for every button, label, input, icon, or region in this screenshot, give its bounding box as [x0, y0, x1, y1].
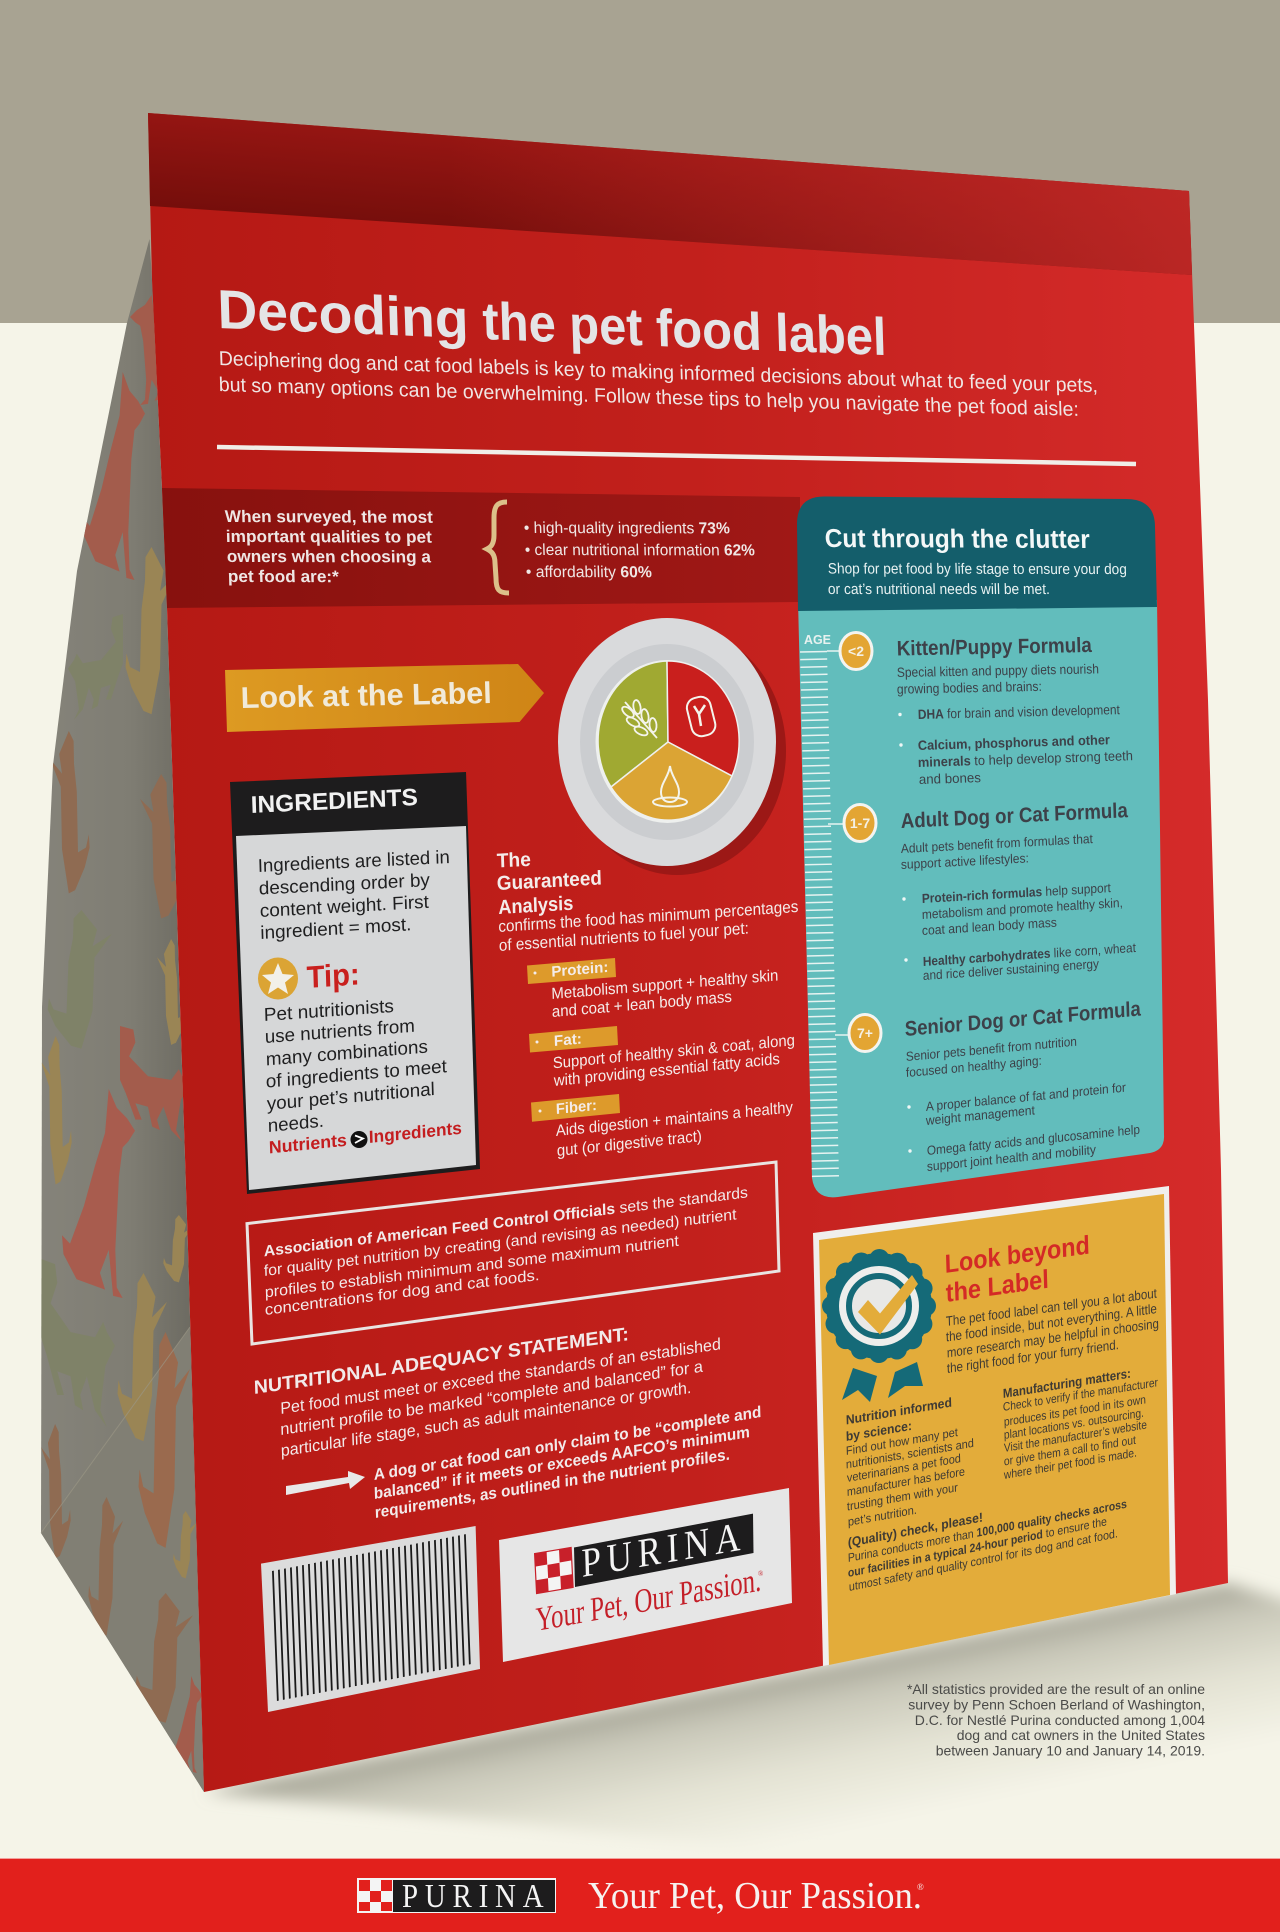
survey intro text: When surveyed, the most	[225, 507, 433, 527]
survey results list	[524, 520, 755, 581]
age badge 1-7: 1-7	[850, 815, 870, 831]
adult formula: coat and lean body mass	[922, 915, 1058, 938]
kitten puppy formula	[896, 634, 1133, 787]
nutrients greater than ingredients	[269, 1118, 462, 1157]
title: Decoding	[217, 278, 469, 350]
adult formula: Healthy carbohydrates like corn, wheat	[923, 940, 1136, 969]
statement body: Pet food must meet or exceed the standards of an established	[280, 1334, 721, 1418]
quality check: our facilities in a typical 24-hour period to ensure the	[848, 1514, 1107, 1580]
nutrition informed by science: pet’s nutrition.	[848, 1503, 917, 1529]
quality check: Purina conducts more than 100,000 quality checks across	[848, 1497, 1127, 1565]
footer bar: ®	[917, 1882, 924, 1892]
nutrition informed by science: nutritionists, scientists and	[846, 1436, 974, 1471]
purina logo panel: ®	[758, 1570, 764, 1578]
fiber item	[531, 1094, 793, 1160]
guaranteed analysis heading: The	[496, 849, 531, 872]
kitten puppy formula: Kitten/Puppy Formula	[896, 634, 1092, 660]
guaranteed analysis heading: Guaranteed	[496, 867, 602, 895]
tip heading: Tip:	[306, 956, 360, 995]
age badge 7+	[849, 1014, 881, 1052]
purina logo panel: Your Pet, Our Passion.	[535, 1561, 762, 1639]
survey footnote	[907, 1681, 1205, 1758]
title: the pet food label	[482, 292, 887, 367]
nutrition informed by science: manufacturer has before	[847, 1464, 965, 1499]
age badge under 2: <2	[848, 643, 864, 659]
light teal body	[798, 600, 1164, 1197]
gold wedge	[611, 742, 732, 820]
food plate pie chart	[558, 618, 786, 875]
senior formula: Omega fatty acids and glucosamine help	[927, 1122, 1140, 1158]
front panel of bag	[148, 113, 1228, 1792]
intro text	[218, 348, 1098, 421]
survey band	[162, 488, 800, 608]
age badge under 2	[840, 632, 872, 670]
survey footnote: D.C. for Nestlé Purina conducted among 1,004	[915, 1712, 1205, 1728]
icon: rosette with checkmark	[826, 1253, 932, 1402]
tip body: of ingredients to meet	[265, 1055, 448, 1092]
AAFCO box: concentrations for dog and cat foods.	[265, 1267, 540, 1319]
fiber item: gut (or digestive tract)	[557, 1127, 702, 1160]
tip body: many combinations	[265, 1036, 428, 1069]
side gusset with pet silhouettes	[41, 239, 204, 1792]
nutrition informed by science: veterinarians a pet food	[847, 1451, 961, 1485]
footer purina logo: PURINA	[402, 1877, 550, 1915]
quality check: utmost safety and quality control for its dog and cat food.	[849, 1526, 1118, 1594]
nutrients greater than ingredients: Nutrients	[269, 1130, 347, 1157]
senior formula	[904, 997, 1141, 1174]
fat item: with providing essential fatty acids	[553, 1050, 780, 1090]
nutrition informed by science: Find out how many pet	[846, 1425, 959, 1458]
panel heading: the Label	[945, 1264, 1049, 1308]
tip body: needs.	[267, 1110, 324, 1136]
icon: oil drop	[653, 766, 687, 806]
senior formula: Senior Dog or Cat Formula	[904, 997, 1141, 1041]
guaranteed analysis intro	[498, 897, 799, 955]
nutritional adequacy statement	[254, 1324, 762, 1522]
look beyond the label panel	[813, 1186, 1176, 1666]
fiber item: Aids digestion + maintains a healthy	[556, 1098, 793, 1140]
guaranteed analysis heading	[496, 849, 602, 919]
fiber item: Fiber:	[556, 1097, 597, 1118]
survey intro text: owners when choosing a	[227, 547, 432, 566]
age badge 7+: 7+	[857, 1025, 873, 1041]
AAFCO box	[247, 1162, 779, 1344]
statement body: nutrient profile to be marked “complete and balanced” for a	[280, 1357, 704, 1439]
nutrition informed by science: by science:	[846, 1418, 912, 1444]
manufacturing matters: produces its pet food in its own	[1004, 1392, 1146, 1429]
survey footnote: survey by Penn Schoen Berland of Washington,	[908, 1697, 1205, 1713]
adult formula: support active lifestyles:	[901, 850, 1029, 872]
statement body: particular life stage, such as adult maintenance or growth.	[281, 1378, 692, 1460]
folded top band	[148, 113, 1192, 275]
ingredients heading: INGREDIENTS	[250, 784, 418, 819]
red wedge	[667, 661, 739, 776]
kitten puppy formula: DHA for brain and vision development	[918, 702, 1120, 722]
manufacturing matters	[1003, 1366, 1158, 1482]
barcode	[261, 1526, 480, 1712]
AAFCO box: Association of American Feed Control Officials sets the standards	[264, 1184, 748, 1260]
statement callout	[374, 1403, 762, 1522]
manufacturing matters: Check to verify if the manufacturer	[1003, 1375, 1158, 1414]
arrow	[286, 1471, 365, 1495]
panel intro: more research may be helpful in choosing	[947, 1316, 1159, 1360]
senior formula: support joint health and mobility	[927, 1142, 1097, 1174]
manufacturing matters: where their pet food is made.	[1003, 1445, 1137, 1482]
adult formula: Adult pets benefit from formulas that	[901, 831, 1093, 856]
nutrition informed by science: trusting them with your	[847, 1480, 958, 1514]
age ruler	[804, 633, 853, 1178]
protein item: and coat + lean body mass	[552, 988, 732, 1021]
quality check: (Quality) check, please!	[848, 1509, 983, 1550]
panel intro: Shop for pet food by life stage to ensure your dog	[828, 561, 1127, 578]
senior formula: focused on healthy aging:	[906, 1053, 1042, 1080]
ingredients body: content weight. First	[259, 891, 429, 921]
survey footnote: *All statistics provided are the result of an online	[907, 1681, 1205, 1697]
kitten puppy formula: Calcium, phosphorus and other	[918, 732, 1111, 753]
ingredients card	[230, 772, 480, 1194]
panel intro: the food inside, but not everything. A little	[946, 1301, 1157, 1344]
fat item: Support of healthy skin & coat, along	[553, 1031, 795, 1072]
guaranteed analysis section	[496, 849, 799, 1160]
dark teal header	[797, 496, 1157, 611]
ingredients body: Ingredients are listed in	[257, 846, 450, 876]
purina logo panel: PURINA	[581, 1514, 747, 1587]
survey results list: • high-quality ingredients 73%	[524, 520, 730, 537]
tip body: your pet’s nutritional	[266, 1078, 435, 1114]
icon: steak	[685, 695, 717, 738]
icon: star badge	[258, 958, 298, 1000]
cut through the clutter panel	[797, 496, 1164, 1197]
panel intro	[828, 561, 1127, 598]
adult formula: Protein-rich formulas help support	[922, 880, 1111, 906]
kitten puppy formula: and bones	[919, 770, 981, 787]
protein item	[527, 958, 779, 1021]
nutrients greater than ingredients: Ingredients	[369, 1118, 462, 1147]
AAFCO box: profiles to establish minimum and some maximum nutrient	[265, 1233, 680, 1301]
survey results list: • affordability 60%	[526, 564, 652, 581]
panel intro: the right food for your furry friend.	[947, 1337, 1119, 1376]
protein item: Metabolism support + healthy skin	[551, 966, 779, 1003]
statement callout: balanced” if it meets or exceeds AAFCO’s minimum	[374, 1423, 750, 1503]
icon: wheat	[620, 699, 657, 738]
survey intro text	[225, 507, 433, 586]
floor shadow	[204, 1583, 1280, 1858]
senior formula: A proper balance of fat and protein for	[926, 1080, 1127, 1114]
manufacturing matters: Visit the manufacturer’s website	[1004, 1417, 1147, 1455]
ingredients body: descending order by	[258, 869, 431, 898]
fat item: Fat:	[554, 1031, 582, 1050]
footer bar	[0, 1858, 1280, 1932]
survey results list: • clear nutritional information 62%	[525, 542, 755, 559]
age ruler: AGE	[804, 633, 831, 647]
tip body: use nutrients from	[264, 1015, 415, 1047]
adult formula	[900, 799, 1136, 983]
footer tagline: Your Pet, Our Passion.	[588, 1875, 922, 1917]
statement callout: requirements, as outlined in the nutrient profiles.	[375, 1446, 730, 1522]
purina logo panel	[499, 1488, 792, 1662]
kitten puppy formula: minerals to help develop strong teeth	[918, 748, 1133, 770]
protein item: Protein:	[551, 959, 609, 981]
checkerboard	[535, 1547, 573, 1594]
intro text: Deciphering dog and cat food labels is key to making informed decisions about what to feed your pets,	[218, 348, 1098, 397]
AAFCO box: for quality pet nutrition by creating (and revising as needed) nutrient	[264, 1206, 737, 1280]
survey footnote: between January 10 and January 14, 2019.	[936, 1742, 1205, 1758]
look at the label arrow: Look at the Label	[240, 677, 492, 715]
guaranteed analysis intro: of essential nutrients to fuel your pet:	[499, 919, 749, 955]
statement heading: NUTRITIONAL ADEQUACY STATEMENT:	[254, 1324, 629, 1399]
title	[217, 278, 887, 367]
adult formula: metabolism and promote healthy skin,	[922, 895, 1123, 922]
panel intro	[946, 1286, 1159, 1376]
adult formula: Adult Dog or Cat Formula	[900, 799, 1128, 833]
guaranteed analysis intro: confirms the food has minimum percentages	[498, 897, 799, 936]
nutrition informed by science: Nutrition informed	[846, 1395, 952, 1427]
green wedge	[598, 661, 668, 787]
statement body	[280, 1334, 721, 1460]
panel heading: Look beyond	[944, 1230, 1090, 1279]
survey intro text: pet food are:*	[228, 567, 340, 586]
manufacturing matters: or give them a call to find out	[1004, 1433, 1137, 1468]
ingredients body: ingredient = most.	[260, 913, 412, 943]
senior formula: Senior pets benefit from nutrition	[906, 1034, 1077, 1064]
manufacturing matters: Manufacturing matters:	[1003, 1366, 1131, 1401]
brace	[487, 502, 509, 593]
tip body	[263, 995, 448, 1136]
tip body: Pet nutritionists	[263, 995, 394, 1025]
age badge 1-7	[844, 804, 876, 842]
kitten puppy formula: growing bodies and brains:	[897, 679, 1042, 697]
panel heading: Cut through the clutter	[824, 523, 1090, 554]
fat item	[529, 1026, 795, 1090]
kitten puppy formula: Special kitten and puppy diets nourish	[897, 661, 1099, 680]
guaranteed analysis heading: Analysis	[498, 893, 574, 919]
statement callout: A dog or cat food can only claim to be “complete and	[374, 1403, 762, 1484]
ingredients body	[257, 846, 450, 943]
survey footnote: dog and cat owners in the United States	[957, 1727, 1205, 1743]
adult formula: and rice deliver sustaining energy	[923, 956, 1100, 983]
survey intro text: important qualities to pet	[226, 527, 432, 547]
nutrition informed by science	[846, 1395, 974, 1529]
panel heading	[944, 1230, 1090, 1308]
panel intro: or cat’s nutritional needs will be met.	[828, 581, 1050, 598]
look at the label arrow	[225, 664, 544, 732]
intro text: but so many options can be overwhelming. Follow these tips to help you navigate the pet food aisle:	[218, 374, 1079, 421]
manufacturing matters: plant locations vs. outsourcing.	[1004, 1406, 1144, 1442]
panel intro: The pet food label can tell you a lot about	[946, 1286, 1157, 1329]
senior formula: weight management	[925, 1102, 1035, 1128]
